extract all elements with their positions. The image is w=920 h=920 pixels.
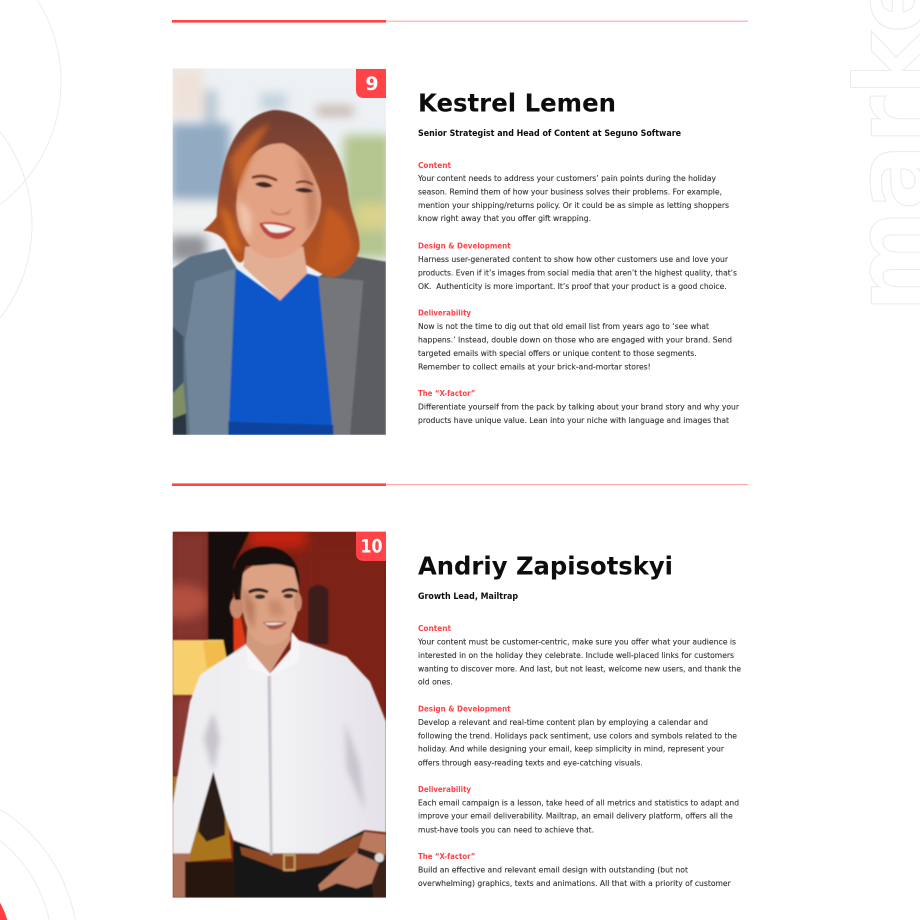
section: Deliverability: targeted emails with special offers or unique content to those segments. xyxy=(418,348,697,358)
name: Kestrel Lemen: Kestrel Lemen xyxy=(418,89,616,118)
section: The X-factor xyxy=(418,388,740,425)
divider: top xyxy=(172,20,748,23)
section: Design & Development: OK. Authenticity is more important. It’s proof that your product is a good choice. xyxy=(418,281,727,291)
section: Content: mention your shipping/returns policy. Or it could be as simple as letting shoppers xyxy=(418,200,729,210)
job title: Growth Lead, Mailtrap xyxy=(418,592,518,602)
section: The X-factor: The “X-factor” xyxy=(418,851,475,861)
section: Content: Your content must be customer-centric, make sure you offer what your audience is xyxy=(417,636,736,646)
section: Content: old ones. xyxy=(418,677,453,687)
section: Deliverability: Deliverability xyxy=(418,308,472,318)
section: Content: Content xyxy=(418,623,451,633)
background circles xyxy=(0,0,75,920)
section: Content: season. Remind them of how your business solves their problems. For example, xyxy=(418,186,722,196)
section: Design & Development: Design & Development xyxy=(418,240,511,250)
expert card 10 xyxy=(150,528,741,898)
red corner circle xyxy=(0,902,7,920)
badge: number 9: 9 xyxy=(365,73,379,95)
section: Deliverability: Now is not the time to dig out that old email list from years ago to ‘see what xyxy=(418,321,710,331)
photo: Kestrel Lemen xyxy=(170,67,390,435)
section: Design & Development: holiday. And while designing your email, keep simplicity in mind, represent your xyxy=(418,744,725,754)
divider: middle xyxy=(172,483,748,486)
job title: Senior Strategist and Head of Content at Seguno Software xyxy=(418,129,681,139)
section: Deliverability xyxy=(418,308,732,371)
badge: number 10: 10 xyxy=(360,536,382,558)
section: The X-factor: Build an effective and relevant email design with outstanding (but not xyxy=(418,864,689,874)
section: Deliverability: Each email campaign is a lesson, take heed of all metrics and statistics to adapt and xyxy=(418,797,739,807)
section: Design & Development: Harness user-generated content to show how other customers use and love your xyxy=(418,254,729,264)
section: Content: Content xyxy=(418,160,451,170)
section: Deliverability: must-have tools you can need to achieve that. xyxy=(418,824,594,834)
section: Deliverability: happens.’ Instead, double down on those who are engaged with your brand. Send xyxy=(418,334,732,344)
section: The X-factor: Differentiate yourself from the pack by talking about your brand story and why your xyxy=(418,402,740,412)
section: Content: know right away that you offer gift wrapping. xyxy=(418,213,591,223)
section: Deliverability xyxy=(418,784,739,834)
section: Deliverability: Deliverability xyxy=(418,784,472,794)
expert card 9 xyxy=(170,67,740,435)
section: Content xyxy=(417,160,729,223)
section: Content: Your content needs to address your customers’ pain points during the holiday xyxy=(417,173,716,183)
section: Content: wanting to discover more. And last, but not least, welcome new users, and thank the xyxy=(418,663,741,673)
section: Design & Development: Design & Development xyxy=(418,704,511,714)
name: Andriy Zapisotskyi: Andriy Zapisotskyi xyxy=(418,551,673,580)
section: Design & Development: products. Even if it’s images from social media that aren’t the highest quality, that’s xyxy=(418,268,737,278)
section: Design & Development: Develop a relevant and real-time content plan by employing a calendar and xyxy=(418,717,708,727)
section: Design & Development xyxy=(418,704,737,767)
badge: number 10 xyxy=(356,532,386,561)
section: Deliverability: improve your email deliverability. Mailtrap, an email delivery platform, offers all the xyxy=(418,811,733,821)
section: Design & Development xyxy=(418,240,737,291)
section: The X-factor: overwhelming) graphics, texts and animations. All that with a priority of customer xyxy=(418,878,731,888)
section: Content xyxy=(417,623,741,687)
photo: Andriy Zapisotskyi xyxy=(172,532,386,898)
section: Design & Development: offers through easy-reading texts and eye-catching visuals. xyxy=(418,757,643,767)
section: The X-factor: products have unique value. Lean into your niche with language and images that xyxy=(418,415,730,425)
section: Deliverability: Remember to collect emails at your brick-and-mortar stores! xyxy=(418,361,651,371)
badge: number 9 xyxy=(356,69,386,98)
section: The X-factor: The “X-factor” xyxy=(418,388,475,398)
section: Content: interested in on the holiday they celebrate. Include well-placed links for customers xyxy=(418,650,734,660)
section: The X-factor xyxy=(418,851,731,888)
section: Design & Development: following the trend. Holidays pack sentiment, use colors and symbols related to the xyxy=(418,730,737,740)
